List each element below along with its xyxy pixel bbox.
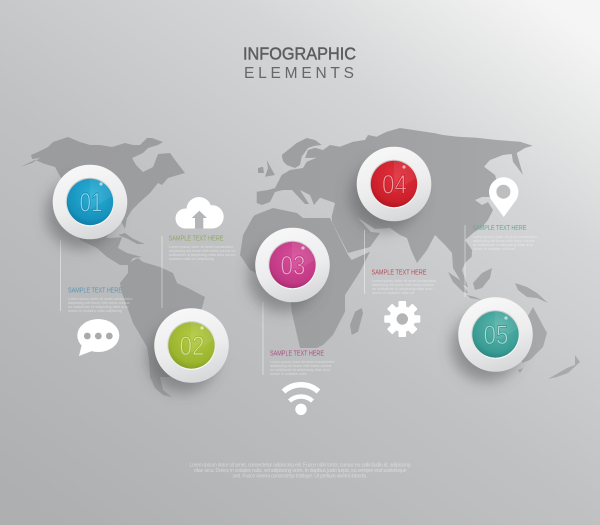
island: Sumatra bbox=[448, 272, 468, 293]
icon: wifi bbox=[284, 385, 318, 415]
badge 02 bbox=[148, 308, 229, 392]
callout text 05: eu sollicitudin id adipiscing vitae arcu bbox=[473, 243, 533, 247]
footer text: vitae arcu. Donec in sodales nulla, vel adipiscing enim. In dapibus justo turpis, eu semper erat scelerisque bbox=[194, 468, 407, 474]
badge 03: 03 bbox=[280, 250, 306, 280]
callout text 01 bbox=[60, 240, 133, 313]
world map bbox=[20, 128, 580, 397]
continent: Scandinavia bbox=[282, 138, 322, 168]
title line: INFOGRAPHIC: INFOGRAPHIC bbox=[243, 44, 356, 64]
continent: South America bbox=[120, 258, 205, 397]
badge 05 bbox=[452, 297, 533, 382]
callout text 04: donec in sodales nulla vel bbox=[372, 291, 414, 295]
callout text 04: eu sollicitudin id adipiscing vitae arcu bbox=[372, 287, 432, 291]
badge 01 bbox=[46, 165, 127, 249]
callout text 01: SAMPLE TEXT HERE bbox=[68, 286, 122, 294]
island: Java bbox=[467, 295, 482, 300]
footer text: sed. Fusce viverra consectetur tristique. Ut pretium viverra lobortis. bbox=[232, 473, 368, 479]
island: Ireland bbox=[258, 167, 264, 173]
badge 03 bbox=[248, 228, 330, 312]
callout text 02: sollicitudin id adipiscing vitae arcu donec bbox=[169, 253, 236, 257]
island: Cuba bbox=[118, 233, 145, 244]
callout text 03: adipiscing elit fusce nibh tortor cursus bbox=[270, 364, 332, 368]
icon: gear bbox=[384, 301, 420, 337]
footer text: Lorem ipsum dolor sit amet, consectetur adipiscing elit. Fusce nibh tortor, cursus eu sollicitudin id, adipiscing bbox=[190, 463, 411, 469]
continent: Australia bbox=[520, 307, 547, 363]
island: Britain bbox=[265, 160, 275, 177]
callout text 05 bbox=[465, 223, 538, 297]
island: New Zealand bbox=[548, 355, 580, 379]
continent: Africa bbox=[240, 208, 370, 348]
badge 01: 01 bbox=[80, 188, 102, 218]
icon: location pin bbox=[489, 177, 518, 217]
icon: cloud upload bbox=[176, 197, 224, 228]
callout text 05: Lorem ipsum dolor sit amet consectetur bbox=[473, 235, 538, 239]
callout text 03: donec in sodales nulla bbox=[270, 372, 307, 376]
callout text 04: SAMPLE TEXT HERE bbox=[372, 268, 427, 276]
island: Borneo bbox=[473, 268, 492, 290]
callout text 03 bbox=[263, 302, 335, 376]
callout text 01: eu sollicitudin id adipiscing vitae arcu bbox=[68, 305, 128, 309]
footer text bbox=[190, 463, 411, 479]
callout text 02: adipiscing elit fusce nibh tortor cursus eu bbox=[169, 249, 236, 253]
island: Madagascar bbox=[350, 308, 363, 335]
callout text 04: adipiscing elit fusce nibh tortor cursus bbox=[372, 283, 434, 287]
callout text 05: SAMPLE TEXT HERE bbox=[472, 223, 527, 232]
badge 04 bbox=[350, 147, 431, 231]
continent: Europe and Asia bbox=[257, 128, 533, 287]
badge 05: 05 bbox=[484, 320, 508, 350]
callout text 03: Lorem ipsum dolor sit amet consectetur bbox=[270, 360, 335, 364]
callout text 01: adipiscing elit fusce nibh tortor cursus bbox=[68, 301, 130, 305]
island: New Guinea bbox=[515, 283, 548, 303]
continent: North America bbox=[20, 137, 185, 265]
callout text 02: sodales nulla vel adipiscing bbox=[169, 257, 214, 261]
callout text 05: donec in sodales nulla vel bbox=[473, 247, 515, 251]
callout text 04: Lorem ipsum dolor sit amet consectetur bbox=[372, 279, 437, 283]
icon: chat bubble bbox=[77, 319, 119, 356]
title line: ELEMENTS: ELEMENTS bbox=[244, 65, 354, 82]
callout text 02: Lorem ipsum dolor sit amet consectetur bbox=[169, 245, 234, 249]
callout text 01: donec in sodales nulla adipiscing bbox=[68, 309, 122, 313]
island: Tasmania bbox=[518, 368, 523, 373]
callout text 02: SAMPLE TEXT HERE bbox=[168, 234, 224, 242]
callout text 01: Lorem ipsum dolor sit amet consectetur bbox=[68, 297, 133, 301]
callout text 03: SAMPLE TEXT HERE bbox=[270, 348, 324, 358]
callout text 04 bbox=[364, 230, 437, 295]
callout text 02 bbox=[162, 234, 236, 308]
callout text 03: eu sollicitudin id adipiscing vitae arcu bbox=[270, 368, 330, 372]
callout text 05: adipiscing elit fusce nibh tortor cursus bbox=[473, 239, 535, 243]
badge 02: 02 bbox=[180, 331, 204, 361]
badge 04: 04 bbox=[382, 170, 407, 200]
title bbox=[243, 44, 356, 82]
